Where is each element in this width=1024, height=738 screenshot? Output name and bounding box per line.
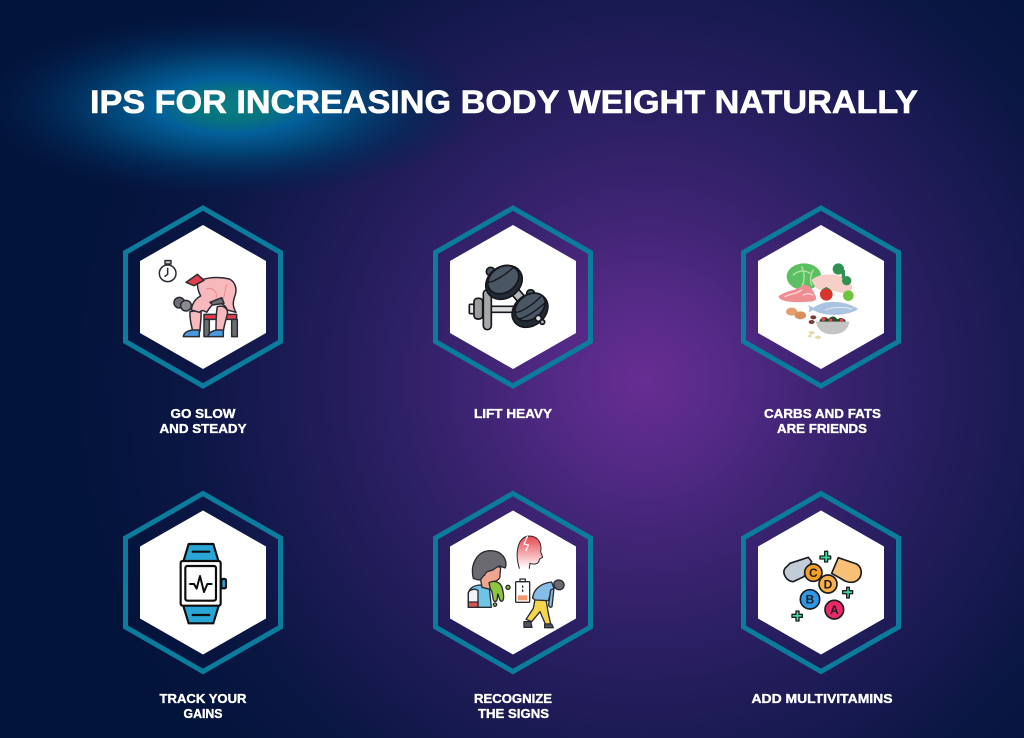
panel: lift heavy [436,208,590,421]
icon: vitamin capsules: D [824,577,833,591]
hexagon frame [126,208,280,386]
label: TRACK YOUR [160,692,246,706]
label: LIFT HEAVY [474,407,553,421]
icon: vitamin capsules: A [830,603,839,617]
label: ARE FRIENDS [777,422,867,436]
icon: man lifting dumbbell with stopwatch [159,261,237,337]
label: RECOGNIZE [474,692,552,706]
icon: assorted foods [778,263,858,339]
icon: vitamin capsules [784,551,861,621]
icon: dumbbells [469,258,555,334]
hexagon frame [436,208,590,386]
panel: track your gains [126,494,280,721]
hexagon frame [744,494,898,672]
label: THE SIGNS [478,707,549,721]
panel: carbs and fats are friends [744,208,898,436]
label: AND STEADY [160,422,247,436]
panel: go slow and steady [126,208,280,436]
icon: symptoms of overtraining [468,536,564,628]
label: CARBS AND FATS [764,407,881,421]
label: GAINS [184,707,222,721]
label: GO SLOW [170,407,236,421]
icon: vitamin capsules: B [806,593,815,607]
hexagon frame [126,494,280,672]
title: IPS FOR INCREASING BODY WEIGHT NATURALLY [90,84,918,120]
hexagon frame [436,494,590,672]
icon: smartwatch [181,544,226,623]
hexagon frame [744,208,898,386]
icon: vitamin capsules: C [809,566,818,580]
panel: add multivitamins [744,494,898,706]
label: ADD MULTIVITAMINS [752,692,892,706]
panel: recognize the signs [436,494,590,721]
